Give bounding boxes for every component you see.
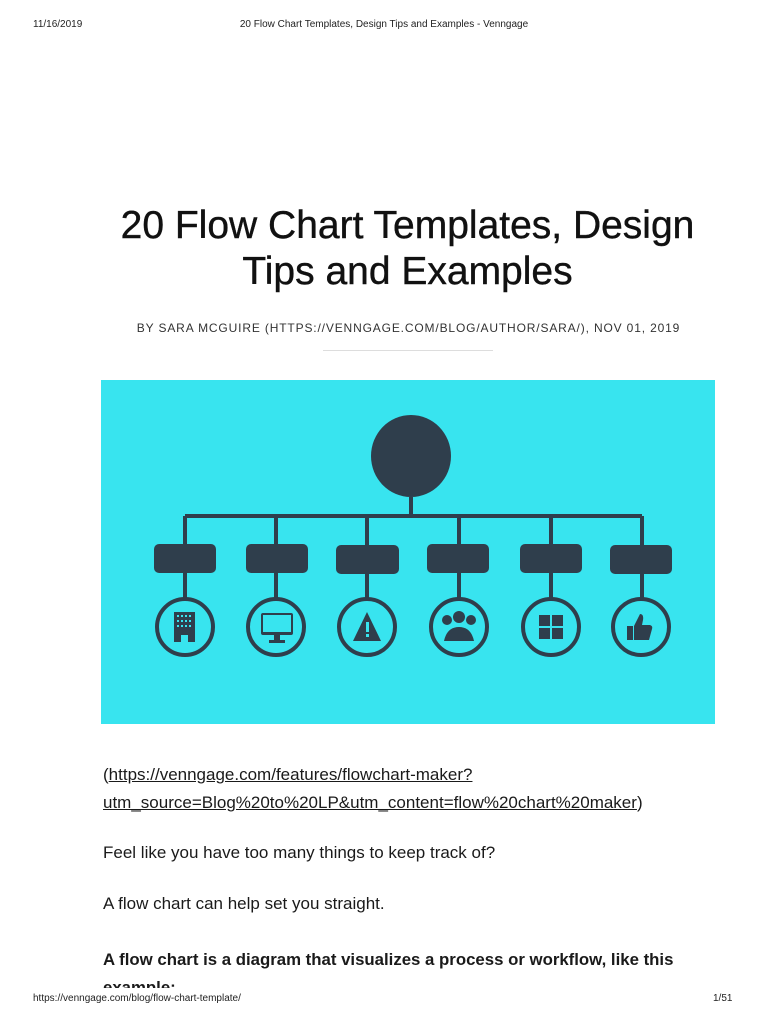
root node	[371, 415, 451, 497]
title	[121, 204, 694, 293]
icons	[174, 611, 652, 643]
bold paragraph	[103, 950, 673, 988]
title: 20 Flow Chart Templates, Design	[121, 204, 694, 247]
link text: utm_source=Blog%20to%20LP&utm_content=flow%20chart%20maker)	[103, 793, 643, 812]
bold paragraph: A flow chart is a diagram that visualizes a process or workflow, like this	[103, 950, 673, 969]
child boxes	[154, 544, 672, 574]
header page title: 20 Flow Chart Templates, Design Tips and Examples - Venngage	[240, 19, 528, 30]
header date: 11/16/2019	[33, 19, 82, 30]
footer url: https://venngage.com/blog/flow-chart-template/	[33, 993, 241, 1004]
title: Tips and Examples	[242, 250, 573, 293]
footer page number: 1/51	[713, 993, 732, 1004]
paragraph 1: Feel like you have too many things to keep track of?	[103, 843, 495, 862]
paragraph 2: A flow chart can help set you straight.	[103, 894, 385, 913]
hero image: flow chart illustration	[101, 380, 715, 724]
link text: (https://venngage.com/features/flowchart-maker?	[103, 765, 472, 784]
link text	[103, 765, 643, 812]
byline: BY SARA MCGUIRE (HTTPS://VENNGAGE.COM/BLOG/AUTHOR/SARA/), NOV 01, 2019	[137, 321, 680, 335]
